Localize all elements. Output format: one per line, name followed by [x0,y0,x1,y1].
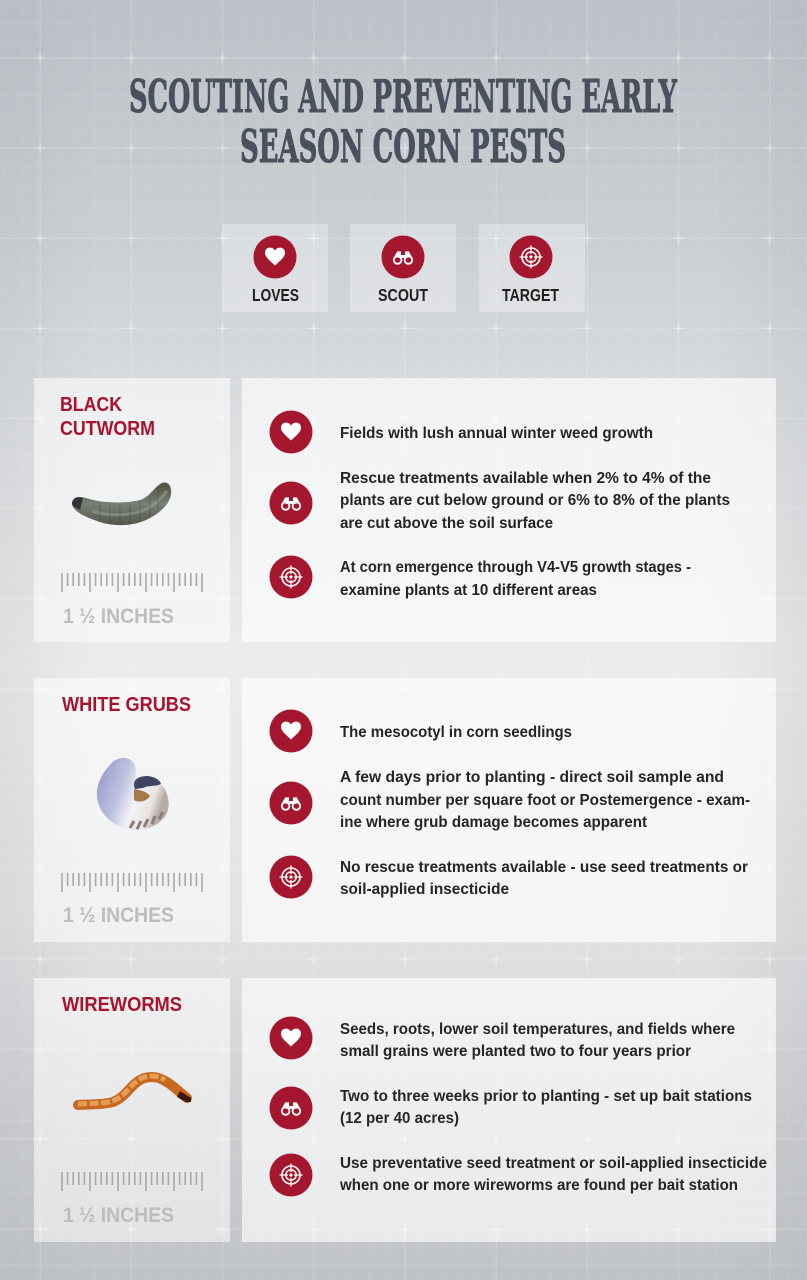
panel: black cutworm details [242,378,776,642]
legend: loves: LOVES [252,285,299,305]
row: target [270,856,748,898]
photo: white grub [97,758,169,830]
row: target [270,1154,767,1196]
panel: black cutworm identification [34,378,230,642]
row: scout: (12 per 40 acres) [340,1110,459,1127]
size label: 1 ½ INCHES [63,1204,174,1227]
row: scout: Two to three weeks prior to planting - set up bait stations [340,1088,752,1105]
title [129,70,677,173]
row: target: At corn emergence through V4-V5 growth stages - [340,559,691,576]
row: loves [270,710,572,752]
row: target: examine plants at 10 different areas [340,582,597,599]
panel: white grubs details [242,678,776,942]
legend: target: TARGET [502,285,559,305]
row: scout: Rescue treatments available when 2% to 4% of the [340,470,711,487]
row: loves: Seeds, roots, lower soil temperatures, and fields where [340,1021,735,1038]
row: loves: small grains were planted two to four years prior [340,1043,691,1060]
ruler [62,1172,202,1191]
row: scout: ine where grub damage becomes apparent [340,814,648,831]
heading: black cutworm: CUTWORM [60,418,155,440]
legend: scout: SCOUT [378,285,428,305]
row: loves [270,410,653,454]
row: scout: plants are cut below ground or 6% to 8% of the plants [340,492,730,509]
legend: loves [222,224,328,312]
row: target: when one or more wireworms are found per bait station [339,1177,738,1194]
panel: wireworms identification [34,978,230,1242]
row: target: Use preventative seed treatment or soil-applied insecticide [340,1155,767,1172]
row: target: soil-applied insecticide [340,881,509,898]
ruler [62,873,202,892]
heading: white grubs: WHITE GRUBS [62,694,191,716]
heading: wireworms: WIREWORMS [62,994,182,1016]
panel: wireworms details [242,978,776,1242]
title: SEASON CORN PESTS [240,120,566,173]
size label: 1 ½ INCHES [63,904,174,927]
legend: scout [350,224,456,312]
photo: black cutworm [72,483,171,525]
row: loves: Fields with lush annual winter weed growth [340,425,653,442]
row: scout [270,470,730,532]
row: scout [270,769,750,831]
ruler [62,573,202,592]
row: target [270,556,691,599]
heading: black cutworm: BLACK [60,394,122,416]
photo: wireworm [78,1076,191,1105]
row: scout: count number per square foot or Postemergence - exam- [340,792,750,809]
row: scout: A few days prior to planting - direct soil sample and [340,769,724,786]
row: target: No rescue treatments available - use seed treatments or [340,859,748,876]
row: loves: The mesocotyl in corn seedlings [340,724,572,741]
panel: white grubs identification [34,678,230,942]
size label: 1 ½ INCHES [63,605,174,628]
row: scout: are cut above the soil surface [340,515,553,532]
row: scout [270,1086,752,1130]
heading: black cutworm [60,394,155,440]
legend: target [479,224,585,312]
row: loves [270,1016,735,1060]
